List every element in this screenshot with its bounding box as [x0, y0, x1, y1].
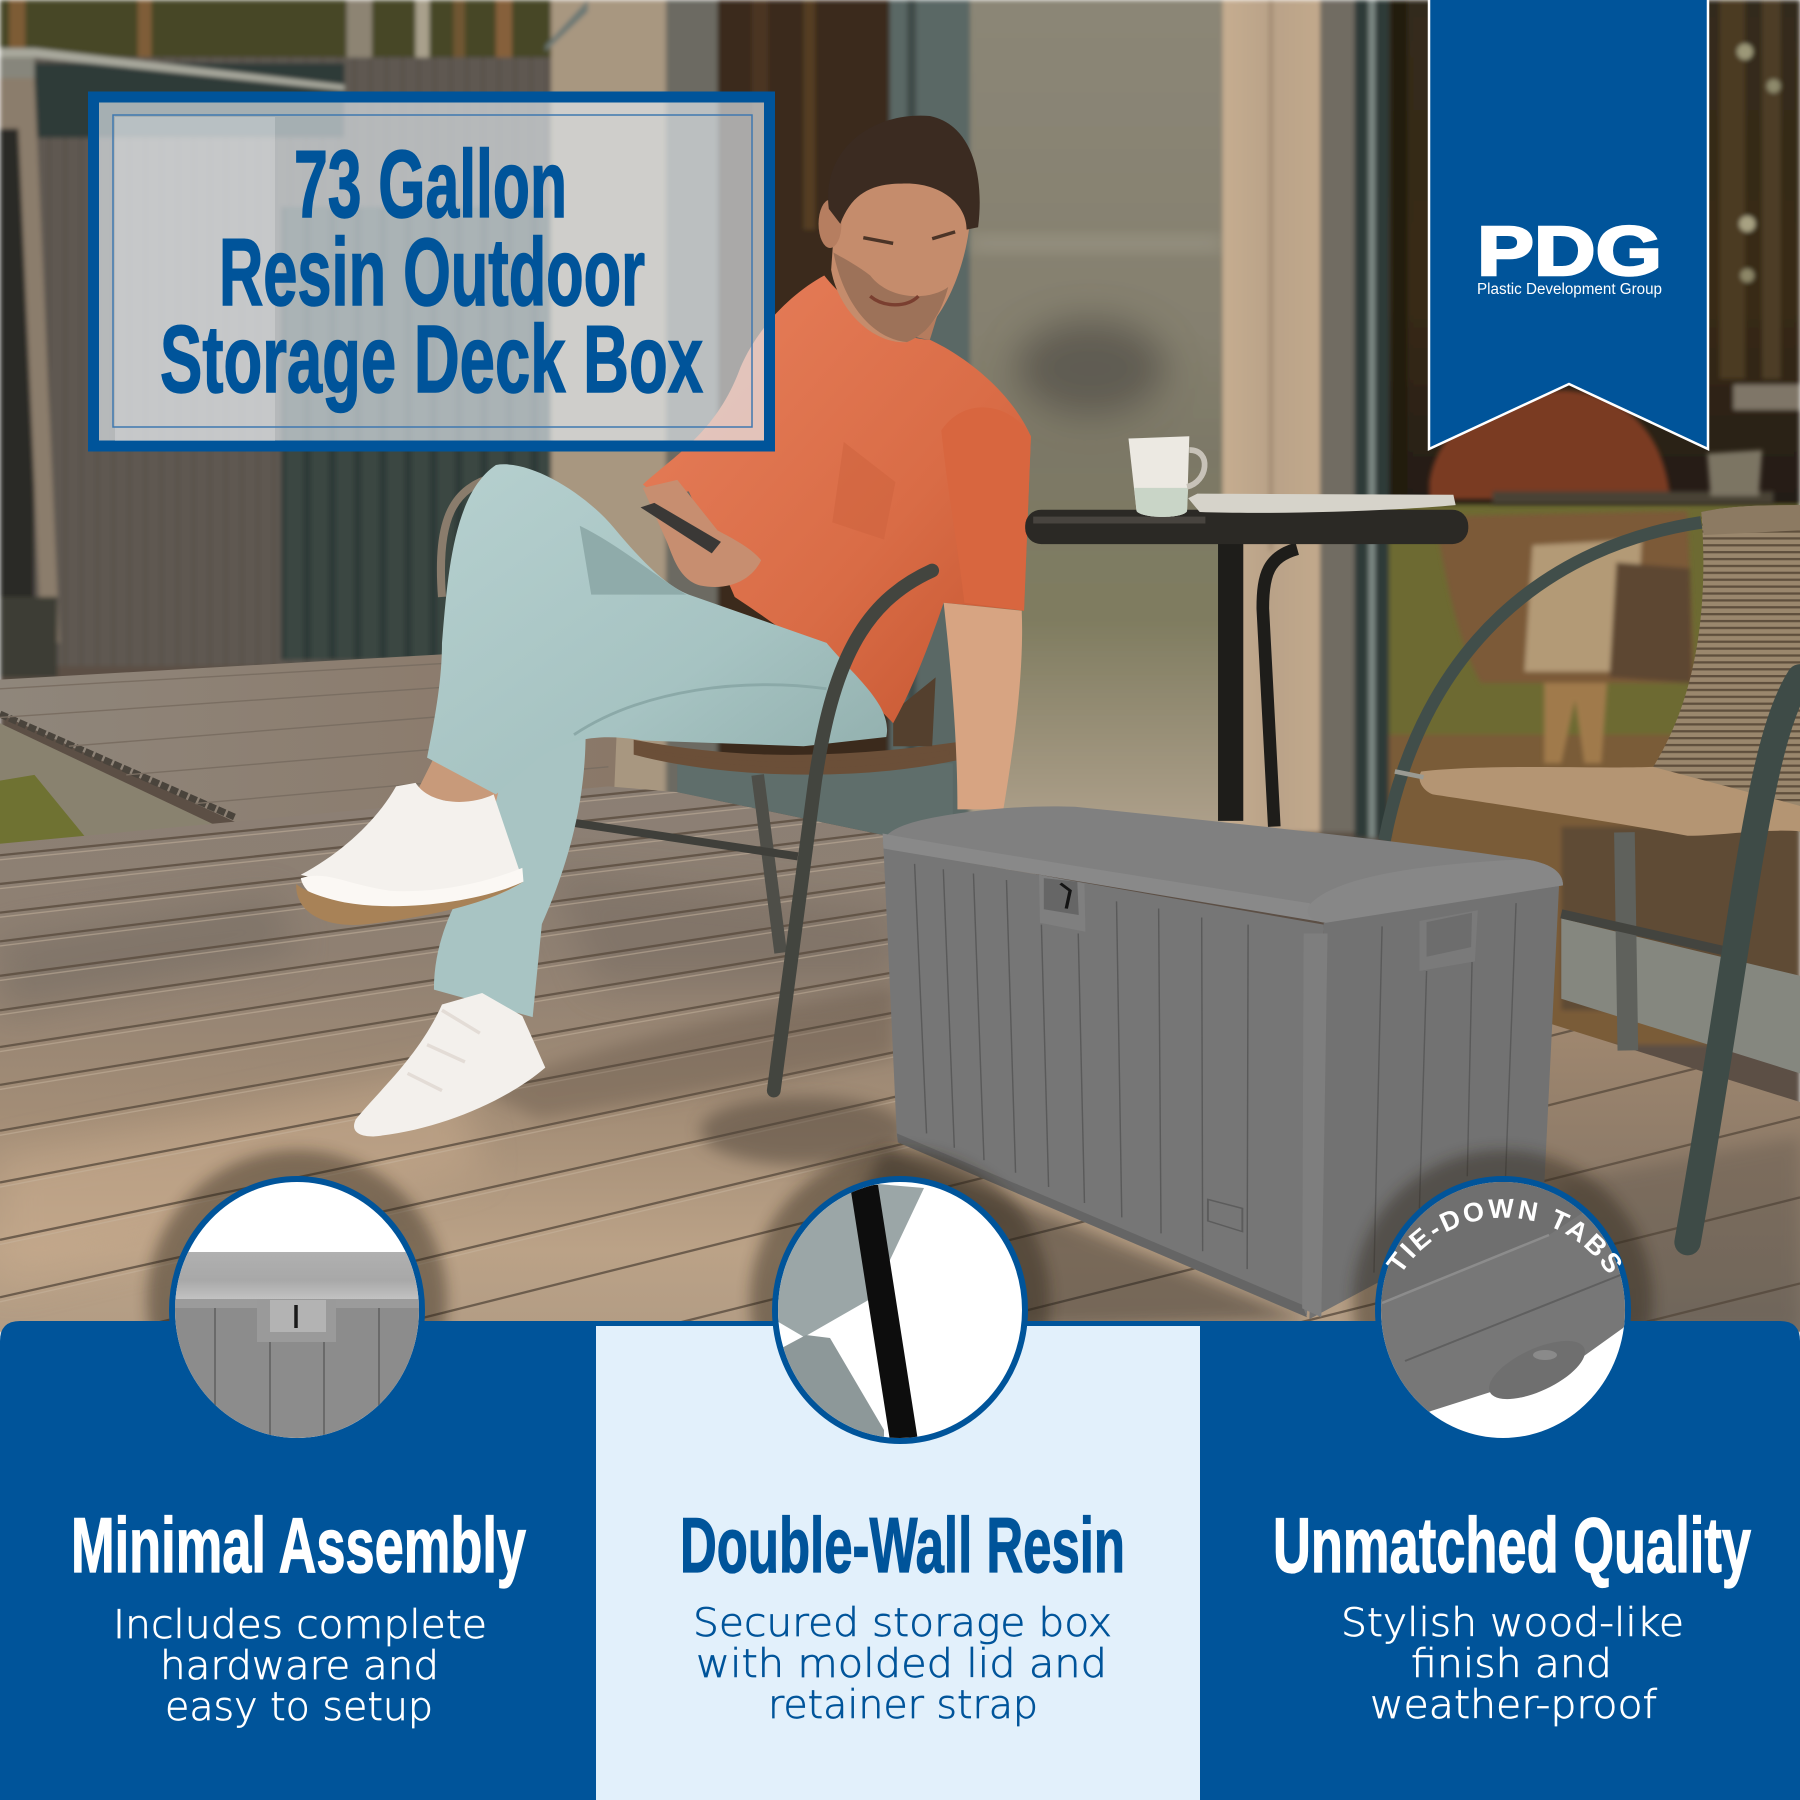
logo tagline: Plastic Development Group: [1477, 281, 1662, 298]
title frame: [94, 97, 770, 446]
detail circle: tie-down tabs: [1375, 1176, 1631, 1438]
threshold in front of right door: [1561, 918, 1800, 1073]
front latch: [1039, 875, 1085, 932]
bottom feature band: [0, 1321, 1800, 1800]
box side face: [1309, 884, 1559, 1319]
feature 2: double-wall resin: [680, 1179, 1125, 1728]
light centre panel: [596, 1326, 1200, 1800]
description: Secured storage box: [693, 1601, 1112, 1646]
plank grooves: [915, 864, 1516, 1273]
feature 1: minimal assembly: [71, 1179, 526, 1730]
heading: Minimal Assembly: [71, 1501, 526, 1589]
mug: [1128, 436, 1189, 517]
description: Includes complete: [113, 1603, 487, 1648]
title panel: [94, 97, 770, 446]
lid top: [883, 806, 1563, 921]
far leg jeans: [434, 721, 586, 1017]
description: with molded lid and: [696, 1642, 1107, 1687]
description: finish and: [1411, 1642, 1612, 1687]
right wicker chair: [1384, 505, 1800, 1242]
PDG logo: PDG: [1477, 212, 1662, 290]
description: Stylish wood-like: [1341, 1601, 1684, 1646]
left arm and hand with phone: [643, 480, 761, 587]
shirt: [643, 276, 1031, 723]
description: [113, 1603, 487, 1730]
detail circle: latch: [170, 1179, 425, 1444]
left chair front arm: [774, 571, 932, 1091]
left chair back hoop and seat: [441, 476, 953, 953]
halo shadows behind detail circles: [147, 1150, 1653, 1450]
head: [831, 163, 970, 342]
box front face: [883, 848, 1324, 1316]
upper deck and retaining edge: [0, 654, 620, 850]
white sneakers: [296, 783, 545, 1137]
laptop: [1188, 494, 1456, 513]
right arm: [944, 603, 1022, 809]
brand ribbon: [1429, 0, 1708, 449]
lid front rim: [883, 834, 1326, 923]
description: [1341, 1601, 1684, 1728]
description: easy to setup: [165, 1685, 433, 1730]
eyes and smile: [863, 232, 955, 243]
blue base panel: [0, 1321, 1800, 1800]
heading: Double-Wall Resin: [680, 1501, 1125, 1589]
side handle: [1419, 910, 1478, 971]
ankle: [416, 758, 498, 822]
dappled shade on planks: [0, 904, 284, 1010]
embossed logo plate: [1208, 1199, 1242, 1232]
reflection of person in the glass door: [1429, 390, 1774, 763]
wooden deck with plank lines: [0, 786, 1800, 1334]
background: forest, shed and house walls: [0, 0, 1800, 1332]
description: hardware and: [160, 1644, 439, 1689]
deck box product: [883, 806, 1563, 1319]
bottom trim: [897, 1133, 1307, 1317]
cafe table with mug and laptop: [1025, 436, 1468, 827]
corner post: [1302, 934, 1328, 1317]
curved label: [1397, 1218, 1612, 1281]
ribbon shape: [1429, 0, 1708, 449]
description: retainer strap: [768, 1683, 1038, 1728]
near leg jeans: [427, 464, 887, 794]
detail circle: tie-down tabs: TIE-DOWN TABS: [1386, 1198, 1622, 1272]
title line 1: 73 Gallon: [294, 131, 567, 238]
detail circle: retainer strap: [775, 1179, 1025, 1445]
title line 3: Storage Deck Box: [160, 306, 703, 413]
feature 3: unmatched quality: [1273, 1176, 1752, 1728]
stubble: [833, 253, 948, 342]
description: [693, 1601, 1112, 1728]
neck: [832, 241, 939, 340]
lighter wall behind glass: [115, 117, 275, 441]
hair: [828, 116, 980, 230]
photo scene: patio with man, table and chairs: [0, 0, 1800, 1336]
lid end dome: [1308, 859, 1563, 923]
description: weather-proof: [1370, 1683, 1657, 1728]
man seated: [416, 116, 1031, 1017]
title line 2: Resin Outdoor: [219, 219, 645, 326]
